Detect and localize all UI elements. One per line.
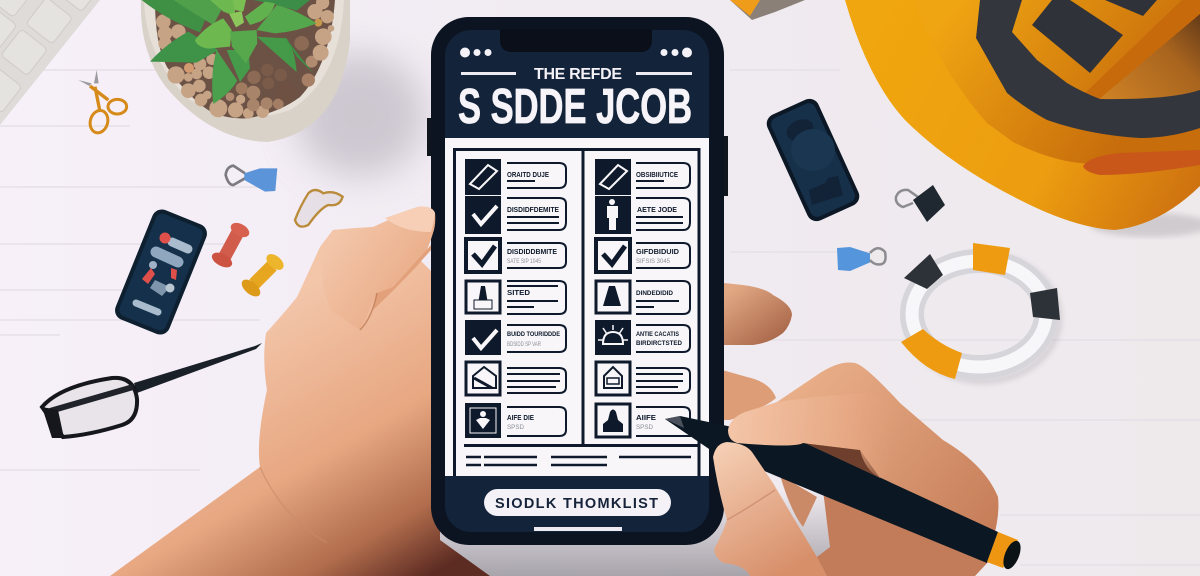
left thumb: [320, 207, 435, 330]
hard hat: [845, 0, 1200, 237]
row 4: [466, 281, 566, 314]
red push pin: [209, 220, 252, 270]
footer button: [484, 489, 671, 516]
row 2: DISDIDFDEMITE: [507, 205, 559, 214]
lower palm and middle finger: [817, 490, 990, 576]
home bar: [534, 527, 622, 531]
paper clip gold: [295, 190, 343, 227]
row 7: SPSD: [507, 425, 525, 431]
index finger: [728, 393, 930, 478]
row 5: [465, 320, 566, 355]
phone body: [431, 17, 724, 545]
row 7: SPSD: [636, 425, 654, 431]
notch: [500, 29, 652, 52]
row 5: [595, 320, 690, 355]
black binder clip: [896, 185, 945, 222]
row 3: SIFSIS 3045: [636, 259, 671, 265]
row 2: AETE JODE: [637, 205, 677, 214]
palm: [110, 227, 490, 576]
keyboard: [0, 0, 102, 125]
subheading: [461, 66, 692, 83]
row 7: AIIFE: [636, 413, 656, 422]
hat tab: [1083, 150, 1200, 175]
row 4: DINDEDIDID: [636, 290, 673, 297]
thumb: [713, 442, 827, 576]
row 5: BUIDD TOURIDDDE: [507, 331, 561, 338]
row 6: [466, 362, 566, 395]
hat crown: [913, 0, 1200, 165]
potted succulent: [141, 0, 350, 142]
yellow push pin: [239, 251, 287, 300]
row 3: [466, 239, 566, 272]
glasses and pen: [42, 343, 262, 438]
fingers behind phone: [715, 282, 792, 420]
blue binder clip left: [226, 166, 277, 192]
checklist sheet: [445, 138, 709, 476]
left column rows: [465, 159, 566, 438]
row 3: SATE SIP 1045: [507, 259, 542, 265]
life ring: [901, 243, 1060, 381]
hat stripes: [976, 0, 1200, 138]
row 4: SITED: [507, 288, 531, 297]
subheading: THE REFDE: [534, 66, 622, 83]
writing hand: [665, 362, 1024, 576]
row 1: OBSIBIIUTICE: [636, 172, 678, 179]
row 2: [465, 196, 566, 234]
blue binder clip right: [837, 247, 886, 271]
back of hand: [777, 362, 998, 540]
row 5: BIRDIRCTSTED: [636, 340, 682, 347]
row 5: ANTIE CACATIS: [636, 331, 680, 338]
stylus pen: [665, 416, 1024, 572]
hat brim: [845, 0, 1200, 230]
footer lines: [466, 457, 691, 465]
row 1: ORAITD DUJE: [507, 170, 549, 179]
small phone left: [112, 206, 210, 338]
row 3: DISDIDDBMITE: [507, 249, 557, 256]
row 4: [596, 281, 690, 314]
row 3: GIFDBIDUID: [636, 249, 679, 256]
row 6: [596, 362, 690, 395]
row 2: [595, 196, 690, 234]
pen shadow: [803, 442, 880, 478]
wrist crease: [260, 467, 327, 543]
top clip: [730, 0, 805, 20]
phone: [427, 17, 728, 545]
row 5: BDSIDD SP VAR: [507, 342, 541, 348]
right column rows: [595, 159, 690, 437]
scissors: [78, 70, 127, 135]
status dots: [460, 48, 692, 58]
row 1: [595, 159, 690, 195]
row 7: [596, 404, 690, 437]
footer button: SIODLK THOMKLIST: [495, 496, 658, 512]
row 1: [465, 159, 566, 195]
row 3: [596, 239, 690, 272]
row 7: [465, 403, 566, 438]
main heading: S SDDE JCOB: [458, 80, 692, 134]
small phone right: [763, 96, 863, 224]
row 7: AIFE DIE: [507, 413, 534, 422]
